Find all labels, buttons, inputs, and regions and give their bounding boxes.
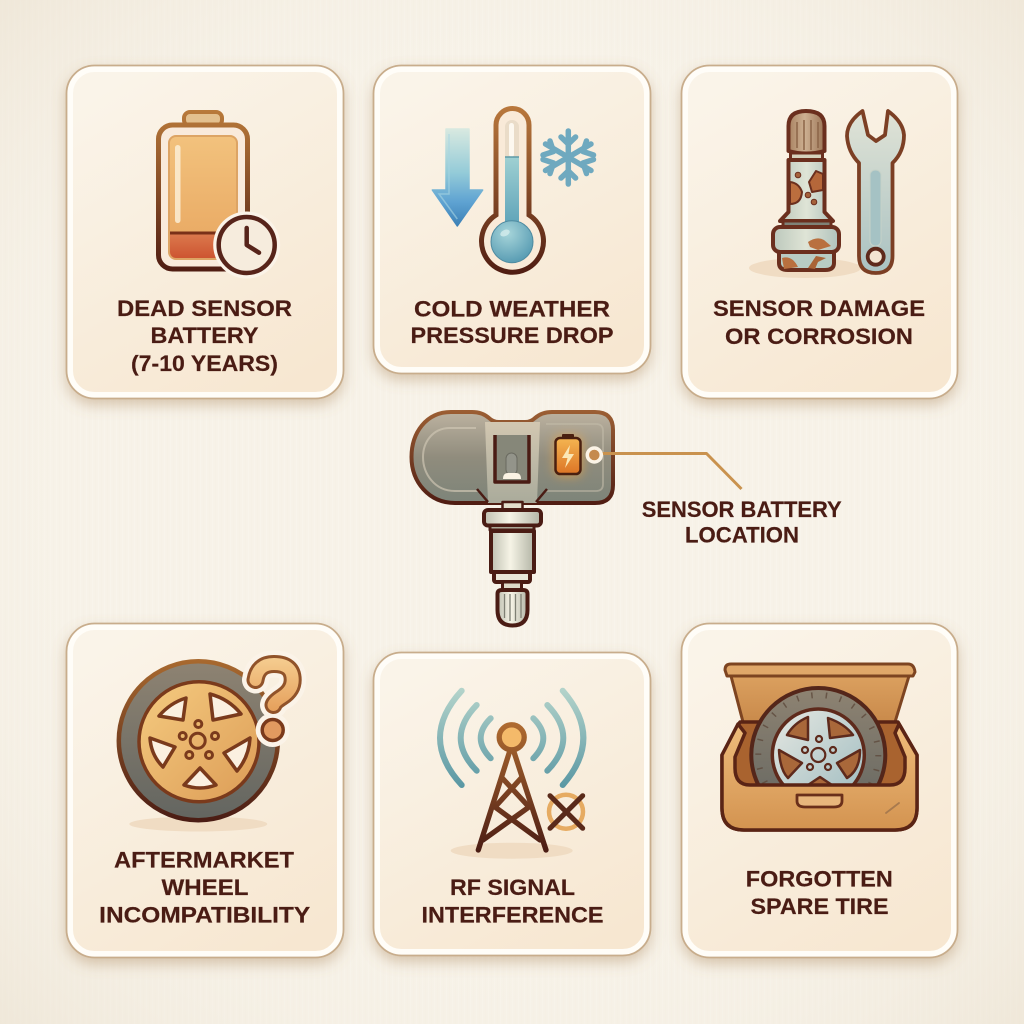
icon: question mark [256, 664, 293, 747]
panel: dead sensor battery [66, 66, 344, 398]
card background [684, 626, 954, 954]
icon: corroded valve stem [773, 111, 839, 270]
label: (7-10 YEARS) [131, 351, 278, 376]
panel: RF signal interference [374, 652, 650, 956]
label [117, 296, 292, 376]
bracket ticks [477, 489, 547, 502]
icon: down arrow [432, 129, 483, 226]
card background [70, 68, 340, 396]
label: AFTERMARKET [114, 848, 295, 873]
label [746, 867, 893, 919]
icon: signal waves [440, 691, 583, 785]
panel: forgotten spare tire [682, 624, 958, 958]
card background [70, 626, 340, 954]
label: FORGOTTEN [746, 867, 893, 892]
panel: sensor damage or corrosion [682, 66, 958, 398]
icon: open trunk with spare tire [722, 664, 917, 830]
callout line [598, 454, 742, 489]
label: INCOMPATIBILITY [99, 903, 311, 928]
bracket pin [503, 453, 521, 479]
card outline [66, 66, 344, 398]
label: sensor battery location: LOCATION [685, 523, 799, 548]
label: OR CORROSION [725, 324, 913, 349]
valve stem [484, 502, 541, 626]
housing highlight [423, 428, 480, 491]
label: SENSOR DAMAGE [713, 296, 925, 321]
shadow [749, 258, 861, 278]
card outline [374, 66, 650, 374]
glow [553, 435, 583, 477]
sensor housing [412, 412, 613, 503]
icon: battery indicator [556, 434, 580, 474]
icon: blocked signal [549, 795, 583, 829]
label: COLD WEATHER [414, 296, 610, 322]
shadow [129, 816, 267, 832]
callout dot [587, 448, 601, 462]
card outline [682, 66, 958, 398]
card background [684, 68, 954, 396]
icon: snowflake [543, 131, 594, 184]
label: DEAD SENSOR [117, 296, 292, 321]
label [422, 875, 604, 928]
label: WHEEL [162, 875, 248, 900]
card background [376, 656, 648, 952]
card outline [682, 624, 958, 958]
icon: clock [213, 212, 280, 278]
card outline [66, 624, 344, 958]
bracket recess [495, 435, 529, 482]
label: INTERFERENCE [422, 903, 604, 928]
card outline [374, 652, 650, 956]
label: BATTERY [150, 323, 259, 348]
label: RF SIGNAL [450, 875, 575, 900]
label: sensor battery location: SENSOR BATTERY [642, 497, 842, 522]
shadow [451, 843, 573, 859]
right lobe highlight [546, 424, 603, 491]
icon: wheel [119, 661, 278, 820]
label: PRESSURE DROP [410, 323, 614, 348]
diagram: TPMS sensor [412, 412, 742, 626]
label [410, 296, 614, 348]
card background [376, 68, 648, 370]
panel: cold weather pressure drop [374, 66, 650, 374]
label [713, 296, 925, 349]
center bracket [485, 422, 540, 503]
label: sensor battery location [642, 497, 842, 548]
panel: aftermarket wheel incompatibility [66, 624, 344, 958]
icon: thermometer [481, 109, 544, 272]
label [99, 848, 311, 928]
label: SPARE TIRE [750, 894, 888, 919]
icon: tower [478, 725, 546, 850]
icon: battery [158, 112, 248, 269]
icon: wrench [847, 111, 904, 273]
